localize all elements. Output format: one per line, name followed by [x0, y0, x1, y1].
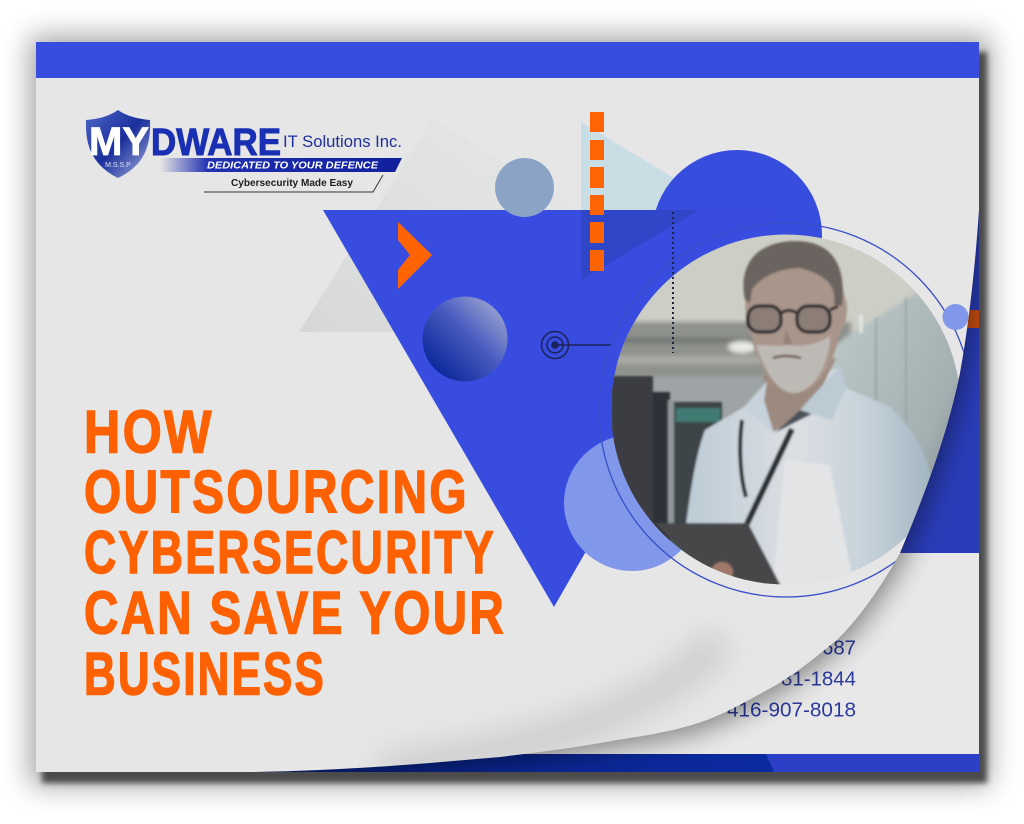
- blue band behind curl: [900, 210, 979, 553]
- target icon: [542, 332, 612, 358]
- wall seams: [876, 298, 906, 430]
- main blue triangle: [323, 210, 666, 607]
- title: [84, 398, 506, 708]
- title: CYBERSECURITY: [84, 519, 496, 586]
- logo MY: MY: [89, 120, 149, 164]
- pipes: [611, 322, 851, 378]
- collar shadow: [775, 410, 812, 433]
- hand: [711, 562, 733, 582]
- logo tagline band: [160, 158, 402, 172]
- title: CAN SAVE YOUR: [84, 580, 506, 646]
- curl cast shadow: [259, 211, 979, 772]
- logo tagline: DEDICATED TO YOUR DEFENCE: [207, 160, 379, 172]
- pale blue triangle: [581, 122, 674, 210]
- ceiling: [617, 234, 926, 364]
- orange dashes: [590, 112, 604, 271]
- shirt pocket: [774, 462, 852, 584]
- bottom bar: [256, 754, 979, 772]
- right collar: [800, 366, 846, 420]
- title: OUTSOURCING: [84, 458, 469, 526]
- shirt: [684, 368, 931, 572]
- neck: [762, 358, 836, 432]
- orbit ring: [599, 223, 973, 597]
- phone numbers: 687: [822, 638, 856, 660]
- ring node: [942, 304, 968, 330]
- orange block behind curl: [967, 310, 979, 328]
- orange chevron: [398, 222, 432, 289]
- back page: [256, 211, 979, 772]
- light blue circle: [564, 438, 682, 571]
- hair: [743, 241, 843, 306]
- logo company name: IT Solutions Inc.: [283, 132, 402, 151]
- beard: [756, 336, 830, 393]
- phone numbers: 416-907-8018: [727, 700, 856, 722]
- top bar: [36, 42, 979, 78]
- mouth: [773, 356, 801, 358]
- server rack centre: [670, 402, 722, 530]
- nose shadow: [784, 332, 792, 345]
- logo shield: [86, 110, 150, 178]
- logo underline: [204, 175, 383, 192]
- title: HOW: [84, 398, 214, 466]
- curl fold shading: [380, 640, 722, 772]
- glasses: [748, 306, 830, 332]
- server rack left: [611, 376, 653, 541]
- gray triangle: [299, 207, 394, 332]
- overlap triangle: [581, 210, 699, 280]
- wall panels: [826, 292, 958, 580]
- face: [745, 262, 847, 393]
- steel blue circle: [495, 158, 554, 217]
- lanyard: [740, 420, 746, 497]
- room depth: [611, 376, 781, 594]
- dotted line: [672, 212, 674, 353]
- logo DWARE: DWARE: [151, 122, 281, 164]
- logo MSSP: M.S.S.P: [105, 162, 131, 169]
- big blue circle: [656, 150, 822, 238]
- title: BUSINESS: [84, 640, 326, 708]
- gradient ball: [422, 296, 508, 382]
- photo: man in server room: [611, 234, 965, 600]
- left collar: [743, 381, 774, 433]
- phone numbers: 81-1844: [781, 668, 856, 690]
- tablet: [655, 523, 781, 586]
- logo: [86, 110, 402, 192]
- phone numbers: [728, 640, 856, 716]
- logo slogan: Cybersecurity Made Easy: [231, 177, 353, 189]
